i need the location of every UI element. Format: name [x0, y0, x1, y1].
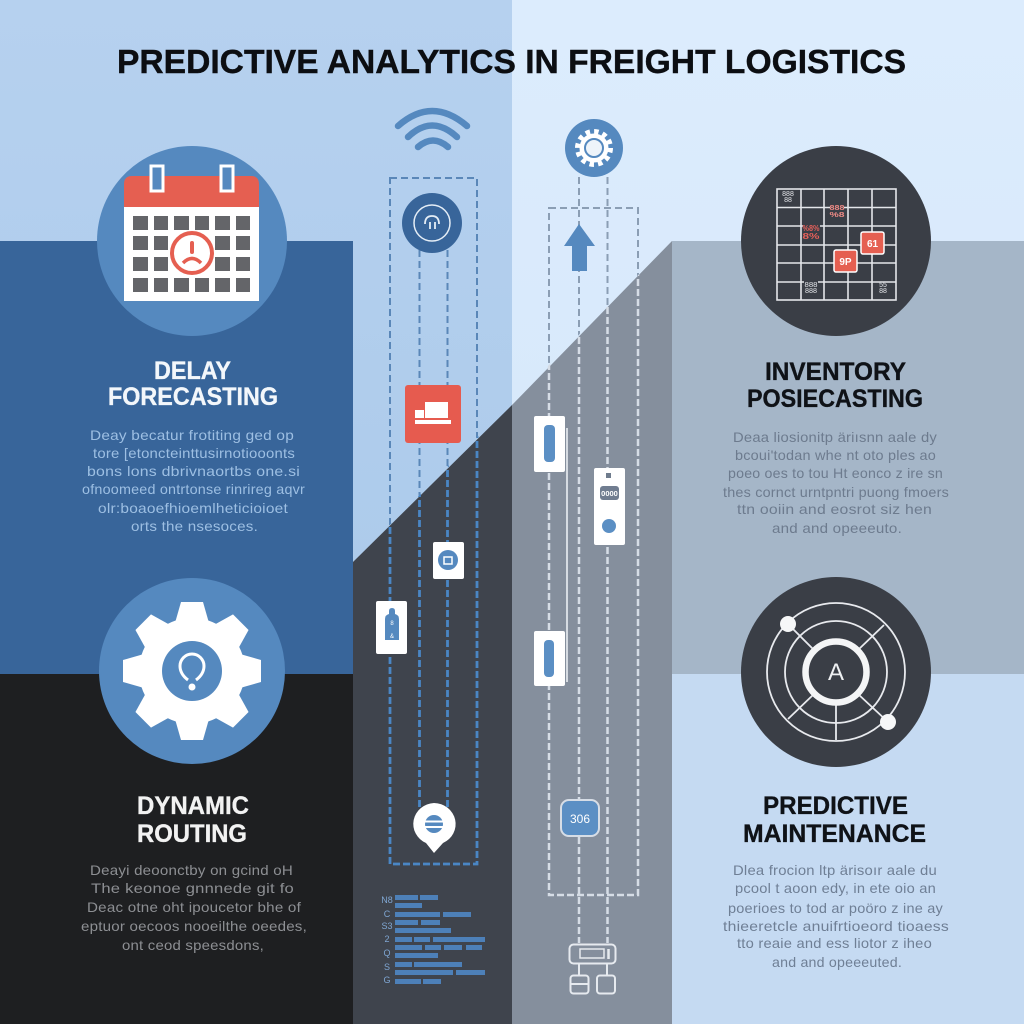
text block: dynamic routing [81, 862, 307, 953]
text block: delay forecasting: orts the nsesoces. [131, 518, 258, 534]
icon: inventory grid: 888 [804, 282, 818, 289]
text block: inventory: Deaa liosionitp äriısnn aale dy [733, 429, 937, 445]
heading: predictive maintenance: PREDICTIVE [763, 792, 908, 820]
icon: inventory grid: 61 [867, 239, 878, 250]
badge: numeric chip [561, 800, 599, 836]
text block: inventory: poeo oes to tou Ht eonco z ire sn [728, 465, 943, 481]
icon: up arrow [564, 224, 595, 271]
heading: inventory posiecasting [747, 358, 923, 413]
panel: dynamic routing background [0, 674, 353, 1024]
text block: inventory [723, 429, 949, 536]
heading: dynamic routing: ROUTING [137, 820, 247, 848]
heading: delay forecasting: DELAY [154, 357, 231, 385]
icon: inventory grid: 8% [802, 231, 820, 241]
icon: inventory grid [741, 146, 931, 336]
icon: chat bubble marker [413, 803, 456, 853]
text block: delay forecasting [82, 427, 305, 534]
panel: predictive maintenance background [672, 674, 1024, 1024]
icon: radar target [741, 577, 931, 767]
icon: inventory grid: 55 [879, 282, 887, 289]
icon: device tree [570, 944, 616, 994]
chart: log bars [381, 895, 485, 985]
chart: log bars: S3 [381, 921, 393, 931]
heading: predictive maintenance [743, 792, 926, 848]
heading: dynamic routing [137, 792, 249, 848]
text block: inventory: and and opeeeuto. [772, 520, 902, 536]
text block: predictive maintenance: Dlea frocion ltp ärisoır aale du [733, 862, 937, 878]
text block: dynamic routing: The keonoe gnnnede git fo [91, 880, 294, 896]
heading: delay forecasting [108, 357, 278, 411]
card: data tag: 0000 [601, 489, 618, 498]
text block: inventory: ttn ooiin and eosrot siz hen [737, 501, 932, 517]
text block: predictive maintenance: and and opeeeuted. [772, 954, 902, 970]
card: bottle sensor [376, 601, 407, 654]
icon: gear with lightbulb [99, 578, 285, 764]
text block: delay forecasting: Deay becatur frotiting ged op [90, 427, 294, 443]
icon: inventory grid: %8% [802, 223, 820, 233]
connector: left dashed frame [390, 178, 477, 864]
icon: red cargo box [405, 385, 461, 443]
text block: predictive maintenance: thieeretcle anuifrtioeord tioaess [723, 918, 949, 934]
text block: predictive maintenance: pcool t aoon edy, in ete oio an [735, 880, 936, 896]
title: PREDICTIVE ANALYTICS IN FREIGHT LOGISTICS [117, 43, 906, 80]
chart: log bars: G [383, 975, 391, 985]
icon: inventory grid: 888 [782, 191, 794, 198]
connector: right dashed frame [549, 177, 638, 943]
text block: predictive maintenance: poerioes to tod ar poöro z ine ay [728, 900, 943, 916]
chart: log bars: N8 [381, 895, 393, 905]
heading: inventory posiecasting: INVENTORY [765, 358, 906, 386]
thin white connector [566, 428, 568, 682]
panel: delay forecasting background [0, 241, 353, 674]
text block: predictive maintenance [723, 862, 949, 970]
chart: log bars: S [384, 962, 390, 972]
icon: calendar with alert [97, 146, 287, 336]
background: dark central wedge [353, 405, 512, 1024]
text block: dynamic routing: eptuor oecoos nooeilthe oeedes, [81, 918, 307, 934]
text block: predictive maintenance: tto reaie and ess liotor z iheo [737, 935, 932, 951]
text block: inventory: thes cornct urntpntri puong fmoers [723, 484, 949, 500]
icon: inventory grid: 9P [839, 257, 852, 268]
chart: log bars: C [384, 909, 391, 919]
text block: delay forecasting: tore [etoncteinttusirnotiooonts [93, 445, 295, 461]
text block: delay forecasting: ofnoomeed ontrtonse rinrireg aqvr [82, 481, 305, 497]
text block: dynamic routing: Deac otne oht ipoucetor bhe of [87, 899, 301, 915]
card: bottle sensor: & [390, 634, 394, 640]
card: bottle sensor: 8 [390, 621, 394, 627]
icon: inventory grid: %8 [830, 210, 844, 219]
card: upper sensor [534, 416, 565, 472]
panel: inventory background [672, 241, 1024, 674]
icon: inventory grid: 88 [784, 197, 792, 204]
icon: inventory grid: 88 [879, 288, 887, 295]
heading: predictive maintenance: MAINTENANCE [743, 820, 926, 848]
icon: cloud node [402, 193, 462, 253]
icon: radar target: A [828, 659, 844, 686]
card: data tag [594, 468, 625, 545]
icon: blue gear node [565, 119, 623, 177]
text block: dynamic routing: Deayi deoonctby on gcind oH [90, 862, 293, 878]
heading: inventory posiecasting: POSIECASTING [747, 385, 923, 413]
background: light blue left half [0, 0, 512, 570]
icon: wifi signal [398, 111, 467, 147]
text block: delay forecasting: olr:boaoefhioemlheticioioet [98, 500, 288, 516]
background: grey central wedge [512, 241, 672, 1024]
text block: delay forecasting: bons lons dbrivnaortbs one.si [87, 463, 300, 479]
heading: dynamic routing: DYNAMIC [137, 792, 249, 820]
chart: log bars: Q [383, 948, 391, 958]
text block: dynamic routing: ont ceod speesdons, [122, 937, 264, 953]
heading: delay forecasting: FORECASTING [108, 383, 278, 411]
background: pale blue right half [512, 0, 1024, 420]
badge: numeric chip: 306 [570, 812, 590, 826]
icon: inventory grid: 888 [805, 288, 817, 295]
text block: inventory: bcoui'todan whe nt oto ples ao [735, 447, 936, 463]
chart: log bars: 2 [384, 934, 390, 944]
card: lower sensor [534, 631, 565, 686]
icon: inventory grid: 888 [830, 203, 844, 212]
card: robot token [433, 542, 464, 579]
